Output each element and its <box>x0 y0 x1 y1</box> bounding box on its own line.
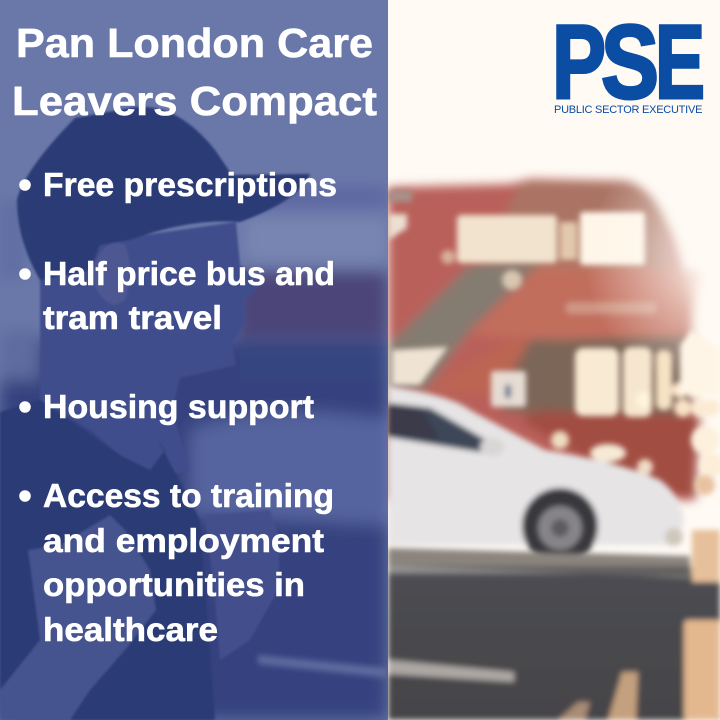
fists and arm <box>0 515 156 720</box>
logo: PSE: S <box>601 4 659 121</box>
bullet: half price travel: Half price bus and <box>43 255 335 292</box>
bullet: training and employment: opportunities in <box>43 566 305 603</box>
bullet: training and employment: Access to training <box>43 477 334 514</box>
bullet: training and employment: and employment <box>43 522 324 559</box>
sun glow over bus <box>594 183 705 376</box>
man's face and neck <box>40 222 262 480</box>
bullet: training and employment: healthcare <box>43 611 218 648</box>
bullet: half price travel: tram travel <box>43 299 222 336</box>
title: Leavers Compact <box>12 78 377 124</box>
list: benefits <box>20 166 337 648</box>
bullet: half price travel <box>20 255 335 336</box>
bullet: free prescriptions: Free prescriptions <box>43 166 337 203</box>
logo: PSE: PUBLIC SECTOR EXECUTIVE <box>554 104 703 116</box>
title: Pan London Care <box>16 20 373 66</box>
bus lower windows <box>575 348 619 416</box>
logo: PSE: P <box>552 4 606 121</box>
title <box>12 20 377 124</box>
panel: street photo with bus and car <box>388 0 720 720</box>
panel: blue photo overlay with man in cap <box>0 0 388 720</box>
distant road marking <box>258 655 388 678</box>
man's cap <box>17 107 310 280</box>
bus upper windows <box>457 215 557 263</box>
car <box>388 386 684 564</box>
bullet: training and employment <box>20 477 334 648</box>
logo: PSE <box>552 4 705 121</box>
road <box>388 530 720 720</box>
man's t-shirt <box>0 400 215 720</box>
bullet: housing support: Housing support <box>43 388 314 425</box>
